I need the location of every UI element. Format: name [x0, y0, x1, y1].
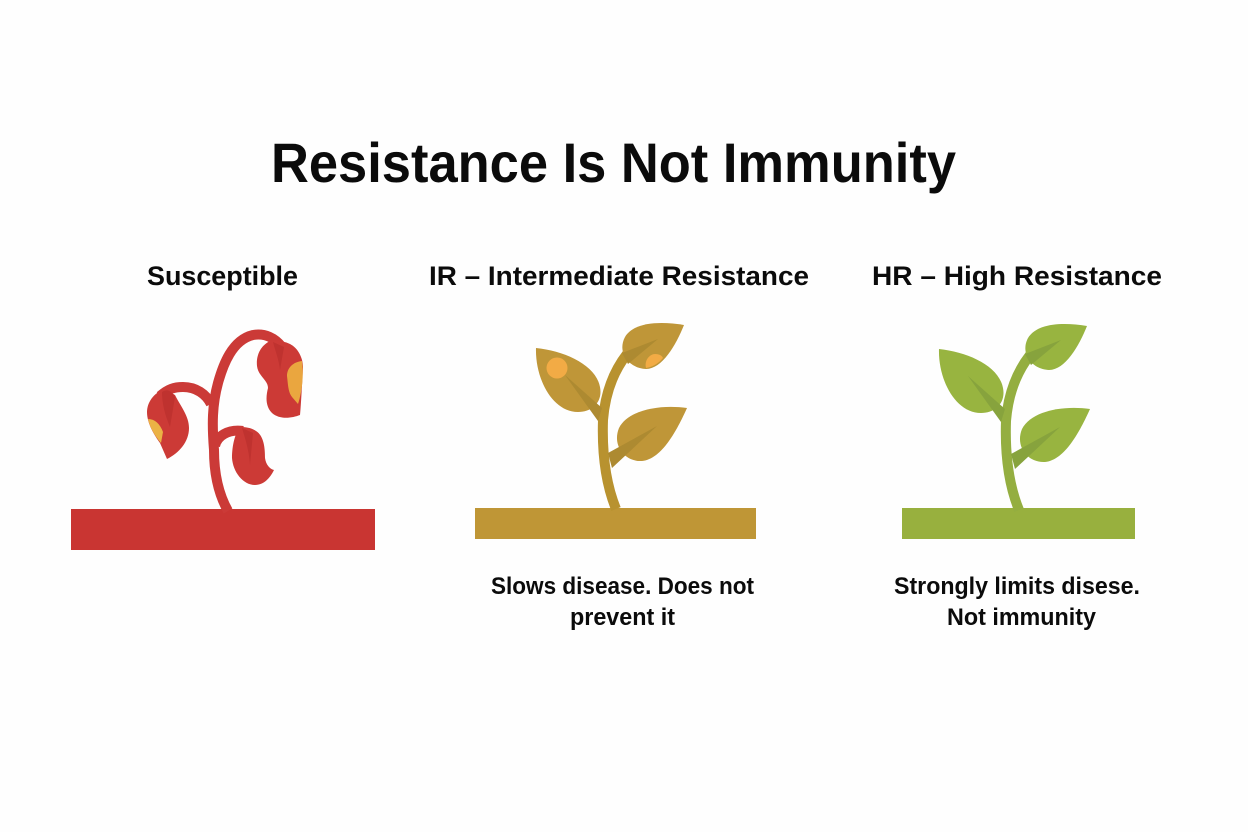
soil bar: ochre	[475, 508, 756, 539]
soil bar: red	[71, 509, 375, 550]
leaves: green	[939, 324, 1090, 462]
caption: intermediate resistance	[491, 573, 754, 631]
title: Resistance Is Not Immunity	[271, 131, 956, 194]
panel: high resistance	[872, 261, 1162, 631]
heading: high resistance: HR – High Resistance	[872, 261, 1162, 291]
heading: susceptible: Susceptible	[147, 261, 298, 291]
disease spot: top leaf	[646, 354, 663, 368]
disease spot: left leaf	[148, 419, 163, 443]
leaf veins and branches: ochre	[565, 339, 658, 468]
leaf veins and branches: green	[968, 340, 1061, 469]
soil bar: green	[902, 508, 1135, 539]
stem and branches: ochre	[603, 354, 627, 509]
panel: intermediate resistance	[429, 261, 809, 631]
leaf: left	[147, 389, 189, 459]
caption: intermediate resistance: prevent it	[570, 604, 675, 631]
caption: high resistance: Not immunity	[947, 604, 1097, 631]
leaf: right	[257, 341, 303, 418]
leaf: middle	[232, 427, 274, 485]
leaf: lower right	[1020, 408, 1090, 462]
stem and branches: red	[160, 335, 282, 511]
caption: intermediate resistance: Slows disease. Does not	[491, 573, 754, 600]
leaf veins: red	[162, 342, 284, 465]
panel: susceptible	[71, 261, 375, 550]
caption: high resistance	[894, 573, 1140, 631]
stem and branches: green	[1006, 355, 1030, 510]
leaf: top	[1025, 324, 1087, 370]
icon: yellowing plant	[475, 323, 756, 539]
disease spot: right leaf	[287, 361, 303, 404]
leaf: left	[536, 348, 600, 412]
heading: intermediate resistance: IR – Intermediate Resistance	[429, 261, 809, 291]
leaf: top	[622, 323, 684, 369]
leaf: lower right	[617, 407, 687, 461]
caption: high resistance: Strongly limits disese.	[894, 573, 1140, 600]
icon: wilting red plant	[71, 335, 375, 550]
leaf: left	[939, 349, 1003, 413]
disease spot: left leaf	[546, 358, 568, 378]
icon: healthy green plant	[902, 324, 1135, 539]
